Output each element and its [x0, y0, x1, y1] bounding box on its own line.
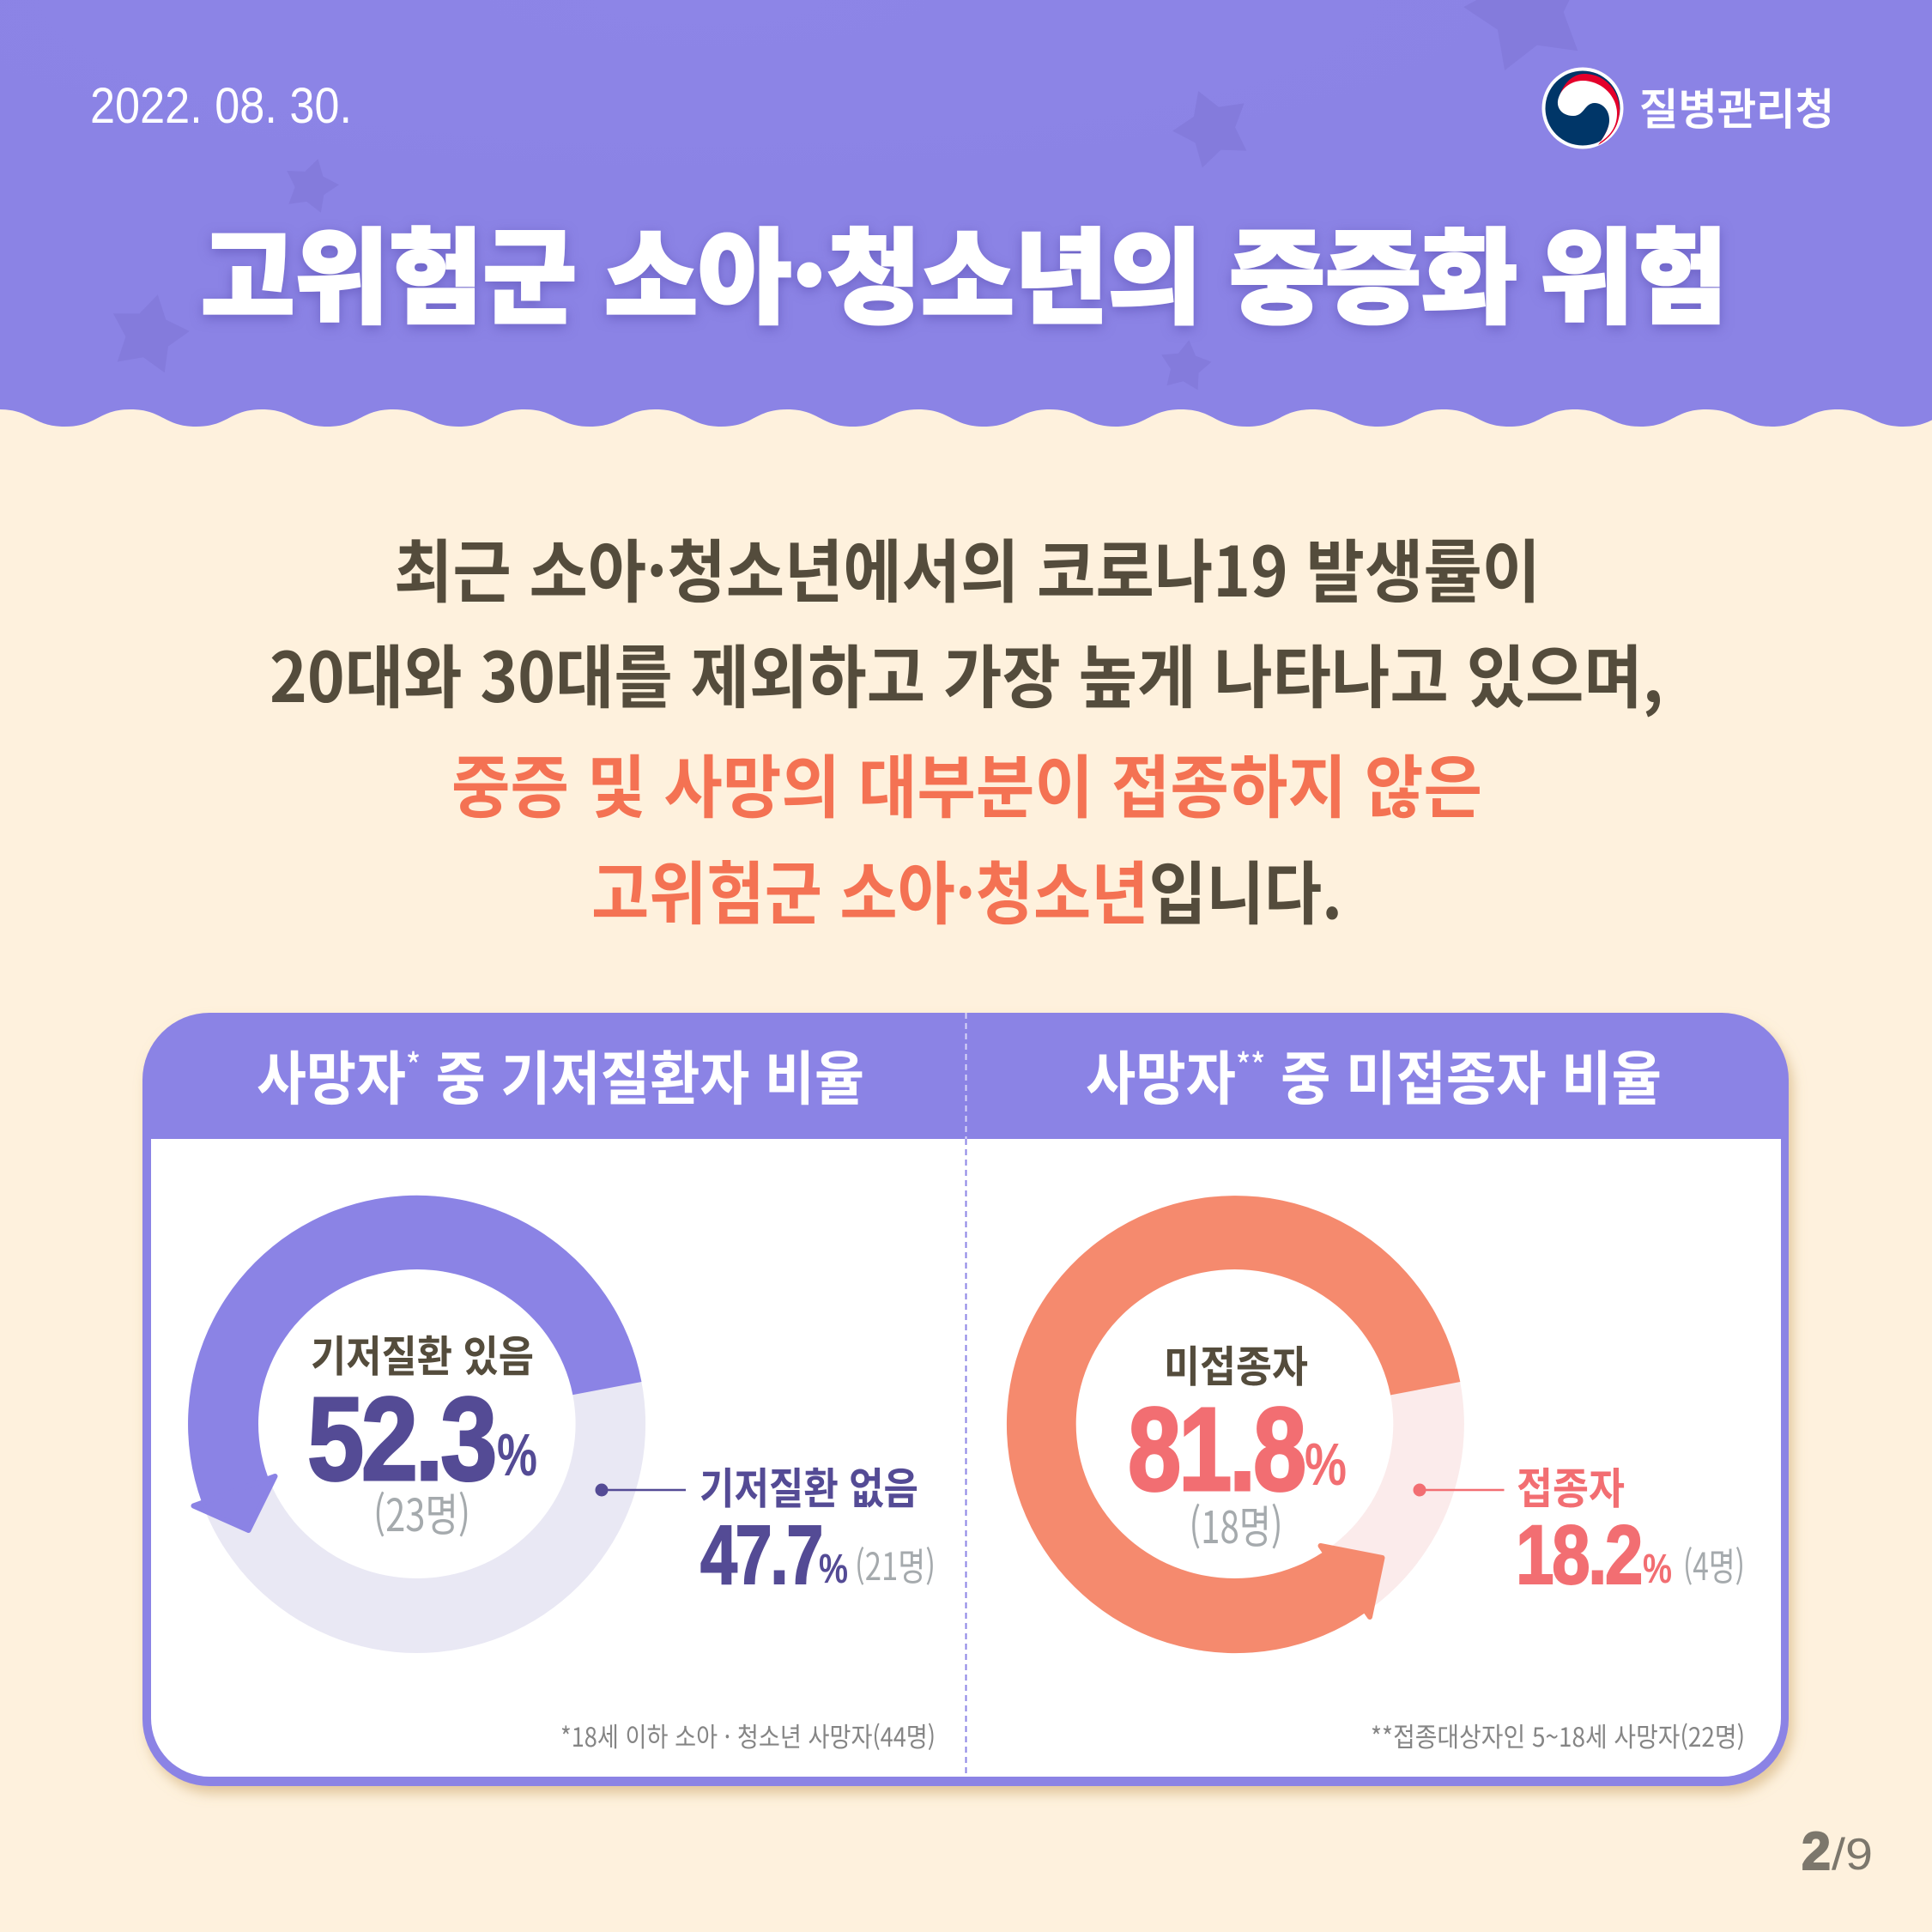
- panel heading: unvaccinated ratio: 사망자: [1086, 1032, 1247, 1117]
- card white body: [151, 1139, 1781, 1777]
- title: 소아·청소년의: [604, 195, 1202, 344]
- date: 2022. 08. 30.: [90, 78, 352, 134]
- side label: without disease: %: [819, 1547, 848, 1592]
- footnote right: **접종대상자인 5~18세 사망자(22명): [1371, 1716, 1745, 1754]
- centre divider: [965, 1013, 966, 1777]
- intro text block: [270, 518, 1663, 939]
- donut centre label: with disease: 기저질환 있음: [311, 1323, 534, 1384]
- donut centre label: unvaccinated: 81.8: [1128, 1384, 1304, 1516]
- donut centre label: with disease: (23명): [373, 1480, 470, 1544]
- donut centre label: with disease: %: [497, 1421, 537, 1488]
- icon: taegeuk emblem: [1541, 67, 1624, 149]
- page number: [1802, 1822, 1873, 1881]
- donut centre label: with disease: 52.3: [307, 1373, 494, 1505]
- panel heading: unvaccinated ratio: **: [1236, 1039, 1265, 1087]
- side label: vaccinated: 접종자: [1517, 1455, 1625, 1517]
- side label: without disease: [700, 1455, 936, 1602]
- panel: statistics card: [142, 1013, 1789, 1786]
- leader line: without disease: [596, 1483, 686, 1497]
- title: 고위험군: [201, 195, 577, 344]
- donut chart: underlying disease: [188, 1196, 645, 1653]
- header background stars: [103, 0, 1601, 391]
- donut centre label: unvaccinated: 미접종자: [1164, 1333, 1308, 1395]
- page number: /9: [1832, 1830, 1873, 1880]
- panel heading: unvaccinated ratio: 중 미접종자 비율: [1265, 1032, 1662, 1117]
- intro line 4 highlighted: 고위험군 소아·청소년입니다.: [591, 839, 1342, 939]
- title: [201, 195, 1728, 344]
- donut centre label: unvaccinated: %: [1305, 1431, 1347, 1498]
- logo: Korea Disease Control and Prevention Agency: [1541, 67, 1834, 149]
- card frame: [142, 1013, 1789, 1786]
- side label: vaccinated: %: [1643, 1547, 1672, 1592]
- donut centre label: unvaccinated: [1128, 1333, 1347, 1556]
- footnote left: *18세 이하 소아 · 청소년 사망자(44명): [560, 1716, 936, 1754]
- side label: without disease: (21명): [855, 1536, 936, 1591]
- panel heading: underlying disease ratio: 중 기저질환자 비율: [421, 1032, 864, 1117]
- title: 위험: [1540, 195, 1728, 344]
- side label: without disease: 47.7: [700, 1508, 821, 1602]
- page number: 2: [1802, 1822, 1831, 1881]
- donut centre label: unvaccinated: (18명): [1190, 1492, 1282, 1556]
- intro line 2: 20대와 30대를 제외하고 가장 높게 나타나고 있으며,: [270, 623, 1663, 723]
- panel heading: underlying disease ratio: *: [406, 1039, 421, 1087]
- intro line 3 highlighted: 중증 및 사망의 대부분이 접종하지 않은: [451, 733, 1482, 833]
- header band with wavy bottom edge: [0, 0, 1932, 427]
- organisation name: 질병관리청: [1639, 76, 1834, 137]
- donut chart: unvaccinated: [1007, 1196, 1464, 1653]
- title: 중증화: [1229, 195, 1517, 344]
- intro line 1: 최근 소아·청소년에서의 코로나19 발생률이: [394, 518, 1541, 617]
- side label: vaccinated: [1516, 1455, 1745, 1602]
- side label: without disease: 기저질환 없음: [700, 1455, 918, 1517]
- leader line: vaccinated: [1413, 1483, 1504, 1497]
- panel heading: underlying disease ratio: 사망자: [257, 1032, 418, 1117]
- side label: vaccinated: 18.2: [1516, 1508, 1641, 1602]
- donut centre label: with disease: [307, 1323, 537, 1544]
- side label: vaccinated: (4명): [1683, 1536, 1745, 1591]
